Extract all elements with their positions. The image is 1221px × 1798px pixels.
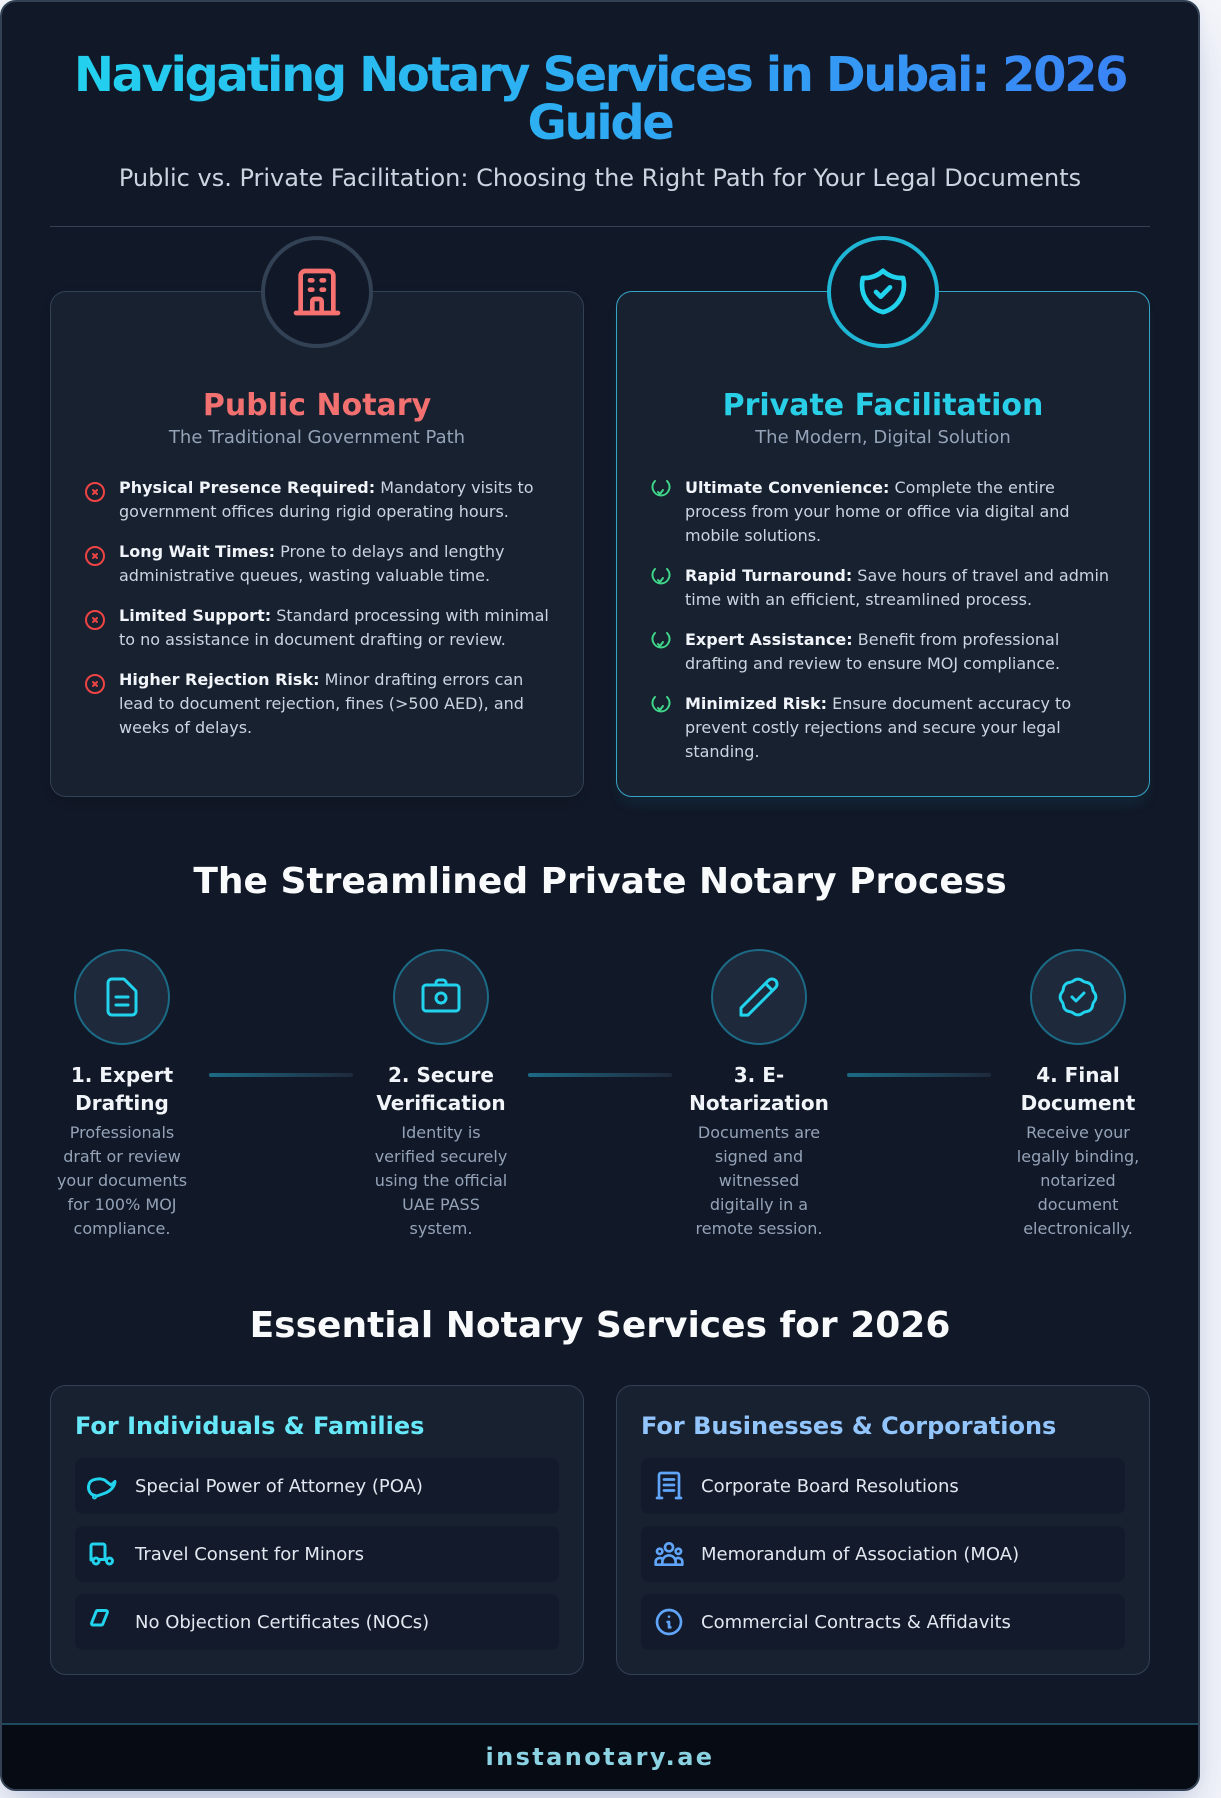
- subheading: private facilitation: The Modern, Digital Solution: [755, 427, 1011, 448]
- icon: people group: [653, 1538, 685, 1570]
- step title: [689, 1063, 829, 1115]
- text: higher rejection risk: Higher Rejection Risk: Minor drafting errors can: [119, 670, 523, 689]
- icon: x circle: [85, 482, 105, 502]
- service row: contracts: [641, 1594, 1125, 1650]
- list item: minimized risk: [651, 694, 1071, 761]
- text: ultimate convenience: Ultimate Convenience: Complete the entire: [685, 478, 1055, 497]
- step description: compliance.: [74, 1219, 170, 1238]
- text: limited support: [119, 606, 549, 649]
- step description: notarized: [1040, 1171, 1116, 1190]
- text: expert assistance: Expert Assistance: Benefit from professional: [685, 630, 1059, 649]
- row label: Special Power of Attorney (POA): [135, 1476, 423, 1497]
- step title: [71, 1063, 173, 1115]
- text: minimized risk: Minimized Risk: Ensure document accuracy to: [685, 694, 1071, 713]
- panel: private facilitation: [616, 291, 1150, 797]
- panel heading: For Businesses & Corporations: [641, 1412, 1056, 1440]
- title: [50, 51, 1150, 147]
- list item: rapid turnaround: [651, 566, 1109, 609]
- step description: UAE PASS: [402, 1195, 480, 1214]
- step description: for 100% MOJ: [67, 1195, 177, 1214]
- list item: higher rejection risk: [85, 670, 524, 737]
- step description: using the official: [375, 1171, 507, 1190]
- step description: your documents: [57, 1171, 187, 1190]
- panel: public notary: [50, 291, 584, 797]
- text: long wait times: [119, 542, 505, 585]
- icon: document building: [656, 1472, 682, 1500]
- process step 3: [689, 949, 829, 1238]
- icon: stroller: [90, 1542, 114, 1566]
- text: rapid turnaround: Rapid Turnaround: Save hours of travel and admin: [685, 566, 1109, 585]
- icon: x circle: [85, 610, 105, 630]
- step description: system.: [410, 1219, 472, 1238]
- footer bar: [0, 1723, 1200, 1791]
- step description: document: [1038, 1195, 1118, 1214]
- subheading: public notary: The Traditional Government Path: [169, 427, 465, 448]
- icon: camera: [393, 949, 489, 1045]
- service row: POA: [75, 1458, 559, 1514]
- text: physical presence: government offices during rigid operating hours.: [119, 502, 509, 521]
- panel heading: For Individuals & Families: [75, 1412, 424, 1440]
- text: expert assistance: [685, 630, 1060, 673]
- step title: 3. E-: [734, 1063, 784, 1087]
- heading: process: The Streamlined Private Notary Process: [193, 861, 1007, 902]
- list item: physical presence: [85, 478, 534, 521]
- service row: travel consent: [75, 1526, 559, 1582]
- text: long wait times: administrative queues, wasting valuable time.: [119, 566, 490, 585]
- step description: digitally in a: [710, 1195, 808, 1214]
- list item: expert assistance: [651, 630, 1060, 673]
- step title: 2. Secure: [388, 1063, 494, 1087]
- text: higher rejection risk: weeks of delays.: [119, 718, 252, 737]
- panel: individuals and families: [50, 1385, 584, 1675]
- step description: Documents are: [698, 1123, 820, 1142]
- connector arrow 3: [847, 1073, 991, 1077]
- row label: Memorandum of Association (MOA): [701, 1544, 1019, 1565]
- icon: info circle: [653, 1606, 685, 1638]
- process step 1: [57, 949, 187, 1238]
- icon: shield badge: [827, 236, 939, 348]
- step title: [1021, 1063, 1135, 1115]
- service row: board resolutions: [641, 1458, 1125, 1514]
- text: rapid turnaround: time with an efficient, streamlined process.: [685, 590, 1032, 609]
- connector arrow 1: [209, 1073, 353, 1077]
- icon: handshake blob: [87, 1477, 116, 1500]
- step description: Professionals: [70, 1123, 174, 1142]
- step description: electronically.: [1023, 1219, 1133, 1238]
- step description: [696, 1123, 822, 1238]
- service row: NOC: [75, 1594, 559, 1650]
- list item: limited support: [85, 606, 549, 649]
- text: ultimate convenience: mobile solutions.: [685, 526, 821, 545]
- text: minimized risk: [685, 694, 1071, 761]
- heading: public notary: Public Notary: [203, 388, 431, 423]
- icon: x circle: [85, 546, 105, 566]
- text: limited support: to no assistance in document drafting or review.: [119, 630, 506, 649]
- step description: draft or review: [63, 1147, 181, 1166]
- text: higher rejection risk: lead to document rejection, fines (>500 AED), and: [119, 694, 524, 713]
- step description: Identity is: [401, 1123, 481, 1142]
- title: Navigating Notary Services in Dubai: 2026: [74, 47, 1126, 103]
- text: ultimate convenience: process from your home or office via digital and: [685, 502, 1070, 521]
- text: ultimate convenience: [685, 478, 1070, 545]
- step description: remote session.: [696, 1219, 822, 1238]
- step description: [1017, 1123, 1139, 1238]
- step title: 4. Final: [1036, 1063, 1120, 1087]
- step title: Notarization: [689, 1091, 829, 1115]
- step description: witnessed: [719, 1171, 799, 1190]
- icon: badge check: [1030, 949, 1126, 1045]
- text: limited support: Limited Support: Standard processing with minimal: [119, 606, 549, 625]
- panel: businesses and corporations: [616, 1385, 1150, 1675]
- step title: 1. Expert: [71, 1063, 173, 1087]
- icon: green check: [651, 568, 671, 584]
- title: Guide: [528, 95, 672, 151]
- step title: Verification: [376, 1091, 506, 1115]
- step title: Document: [1021, 1091, 1135, 1115]
- icon: document: [74, 949, 170, 1045]
- icon: pencil: [711, 949, 807, 1045]
- icon: green check: [651, 696, 671, 712]
- text: rapid turnaround: [685, 566, 1109, 609]
- step description: [375, 1123, 507, 1238]
- text: physical presence: Physical Presence Required: Mandatory visits to: [119, 478, 534, 497]
- icon: public building badge: [261, 236, 373, 348]
- icon: green check: [651, 632, 671, 648]
- service row: MOA: [641, 1526, 1125, 1582]
- text: higher rejection risk: [119, 670, 524, 737]
- step description: Receive your: [1026, 1123, 1130, 1142]
- row label: Corporate Board Resolutions: [701, 1476, 959, 1497]
- subtitle: Public vs. Private Facilitation: Choosing the Right Path for Your Legal Documents: [119, 164, 1081, 192]
- heading: private facilitation: Private Facilitation: [723, 388, 1043, 423]
- text: minimized risk: standing.: [685, 742, 760, 761]
- step title: Drafting: [75, 1091, 169, 1115]
- step description: [57, 1123, 187, 1238]
- text: expert assistance: drafting and review to ensure MOJ compliance.: [685, 654, 1060, 673]
- icon: tilted card: [90, 1609, 109, 1626]
- row label: Travel Consent for Minors: [135, 1544, 364, 1565]
- text: long wait times: Long Wait Times: Prone to delays and lengthy: [119, 542, 505, 561]
- step title: [376, 1063, 506, 1115]
- list item: ultimate convenience: [651, 478, 1070, 545]
- step description: legally binding,: [1017, 1147, 1139, 1166]
- icon: x circle: [85, 674, 105, 694]
- icon: green check: [651, 480, 671, 496]
- step description: verified securely: [375, 1147, 507, 1166]
- step description: signed and: [715, 1147, 803, 1166]
- text: physical presence: [119, 478, 534, 521]
- list item: long wait times: [85, 542, 505, 585]
- heading: services: Essential Notary Services for 2026: [250, 1305, 950, 1346]
- row label: Commercial Contracts & Affidavits: [701, 1612, 1011, 1633]
- process step 2: [375, 949, 507, 1238]
- connector arrow 2: [528, 1073, 672, 1077]
- text: minimized risk: prevent costly rejections and secure your legal: [685, 718, 1061, 737]
- process step 4: [1017, 949, 1139, 1238]
- row label: No Objection Certificates (NOCs): [135, 1612, 429, 1633]
- footer website text: instanotary.ae: [486, 1743, 714, 1771]
